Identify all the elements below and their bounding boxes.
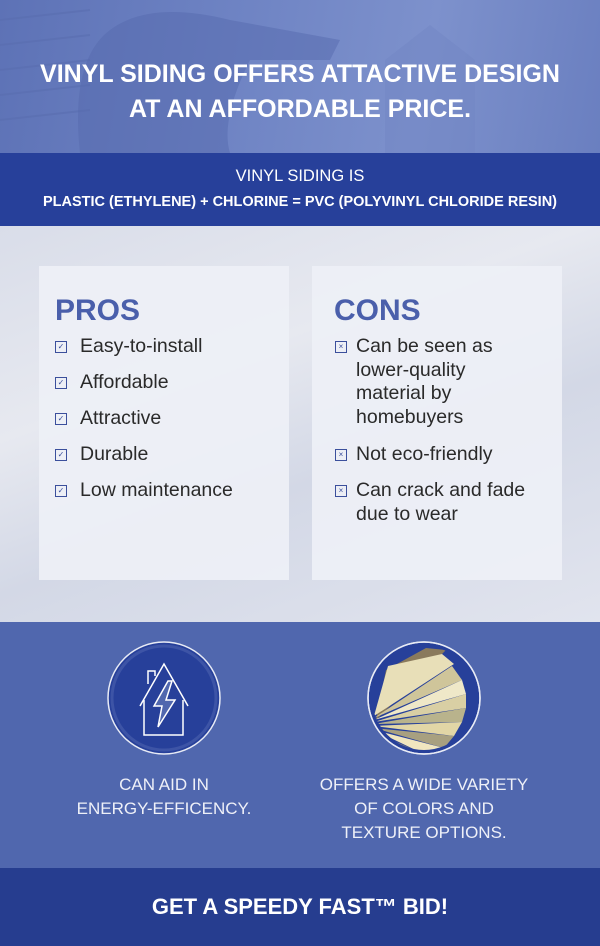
panel: cons: × bbox=[339, 450, 343, 459]
caption: variety bbox=[320, 775, 528, 842]
panel: pros: Affordable bbox=[80, 371, 169, 393]
caption: energy efficiency bbox=[77, 775, 251, 818]
panel: pros: Attractive bbox=[80, 407, 161, 429]
heading: pros: PROS bbox=[55, 294, 140, 327]
footer call to action bbox=[0, 868, 600, 946]
title: AT AN AFFORDABLE PRICE. bbox=[129, 95, 471, 123]
heading: cons: CONS bbox=[334, 294, 421, 327]
caption: variety: TEXTURE OPTIONS. bbox=[341, 823, 507, 842]
panel: cons: due to wear bbox=[356, 502, 458, 524]
panel: pros: ✓ bbox=[58, 342, 64, 351]
panel: cons: homebuyers bbox=[356, 406, 463, 428]
panel: pros: Easy-to-install bbox=[80, 335, 202, 357]
caption: energy efficiency: CAN AID IN bbox=[119, 775, 209, 794]
panel: cons: Not eco-friendly bbox=[356, 443, 493, 465]
panel: pros: Low maintenance bbox=[80, 479, 233, 501]
panel: cons bbox=[312, 266, 562, 580]
icon: house energy bbox=[107, 641, 221, 755]
icon: color swatches bbox=[367, 641, 481, 755]
panel: cons: material by bbox=[356, 382, 451, 404]
caption: variety: OFFERS A WIDE VARIETY bbox=[320, 775, 528, 794]
panel: cons: Can be seen as bbox=[356, 335, 493, 357]
pros cons section background bbox=[0, 226, 600, 622]
panel: pros: ✓ bbox=[58, 486, 64, 495]
header banner bbox=[0, 0, 600, 153]
footer call to action: GET A SPEEDY FAST™ BID! bbox=[152, 894, 448, 919]
definition band: PLASTIC (ETHYLENE) + CHLORINE = PVC (POLYVINYL CHLORIDE RESIN) bbox=[43, 194, 557, 210]
definition band bbox=[0, 153, 600, 226]
panel: cons: Can crack and fade bbox=[356, 479, 525, 501]
title bbox=[40, 60, 560, 123]
definition band: VINYL SIDING IS bbox=[236, 167, 364, 185]
panel: cons: × bbox=[339, 486, 343, 495]
caption: variety: OF COLORS AND bbox=[354, 799, 494, 818]
panel: pros: ✓ bbox=[58, 450, 64, 459]
caption: energy efficiency: ENERGY-EFFICENCY. bbox=[77, 799, 251, 818]
panel: pros: ✓ bbox=[58, 414, 64, 423]
panel: pros: Durable bbox=[80, 443, 148, 465]
benefits section bbox=[0, 622, 600, 868]
panel: cons: × bbox=[339, 342, 343, 351]
panel: cons: lower-quality bbox=[356, 358, 465, 380]
panel: pros bbox=[39, 266, 289, 580]
panel: pros: ✓ bbox=[58, 378, 64, 387]
title: VINYL SIDING OFFERS ATTACTIVE DESIGN bbox=[40, 60, 560, 88]
